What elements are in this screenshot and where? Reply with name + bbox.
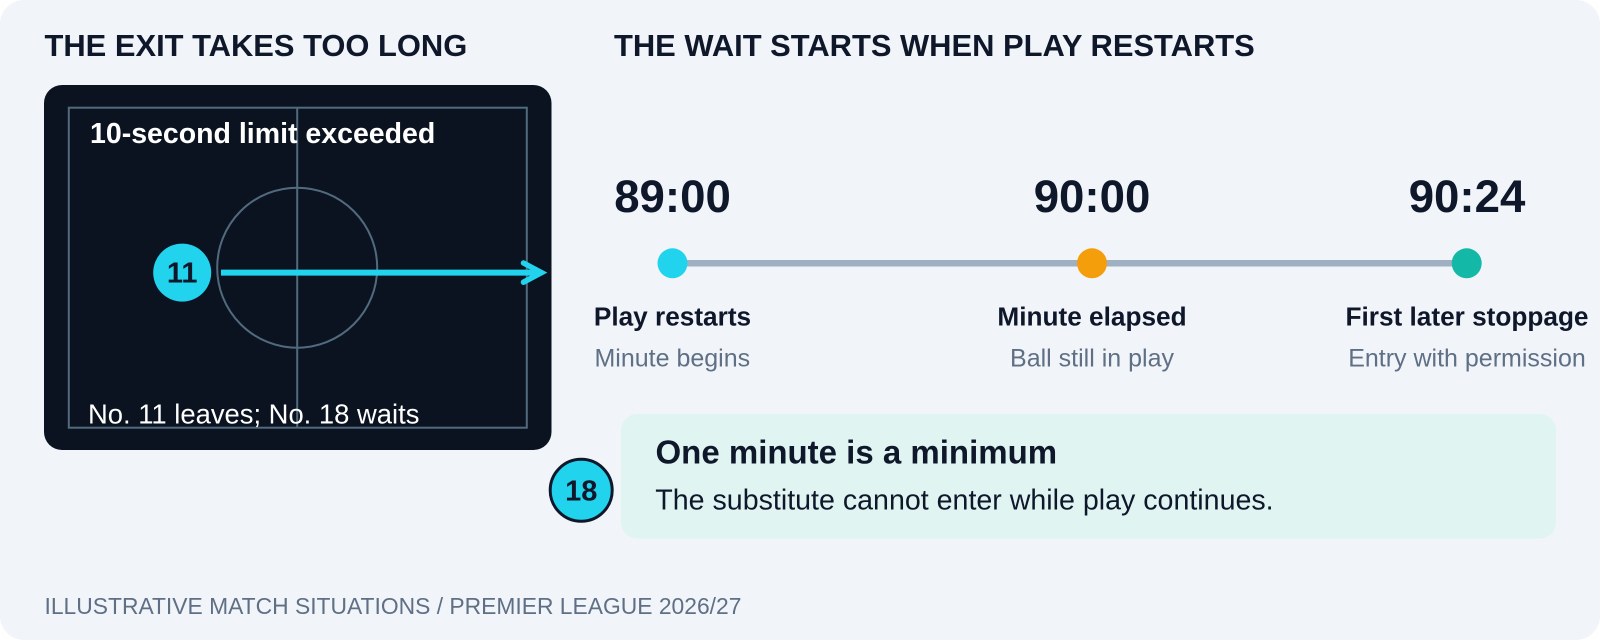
label: minute elapsed <box>997 301 1187 372</box>
callout: The substitute cannot enter while play continues. <box>655 484 1274 516</box>
label: minute elapsed: Ball still in play <box>1010 344 1174 372</box>
heading: exit: THE EXIT TAKES TOO LONG <box>44 28 467 63</box>
time: 89:00: 89:00 <box>614 171 731 222</box>
pitch caption: No. 11 leaves; No. 18 waits <box>88 398 419 429</box>
label: first later stoppage <box>1345 301 1589 372</box>
label: play restarts <box>594 301 751 372</box>
heading: wait: THE WAIT STARTS WHEN PLAY RESTARTS <box>614 28 1255 63</box>
label: first later stoppage: First later stoppage <box>1345 301 1589 331</box>
player 11 marker: 11 <box>167 258 198 290</box>
player 18 marker <box>550 459 612 521</box>
label: play restarts: Minute begins <box>594 344 750 372</box>
label: first later stoppage: Entry with permission <box>1348 344 1586 372</box>
callout <box>621 414 1556 538</box>
timeline <box>594 171 1589 372</box>
label: minute elapsed: Minute elapsed <box>997 301 1187 331</box>
dot: play restarts <box>658 248 688 278</box>
arrow: player exit <box>221 263 542 282</box>
footer: ILLUSTRATIVE MATCH SITUATIONS / PREMIER LEAGUE 2026/27 <box>44 593 741 619</box>
callout: One minute is a minimum <box>656 434 1057 471</box>
label: play restarts: Play restarts <box>594 301 751 331</box>
panel: pitch <box>44 85 552 450</box>
player 18 marker: 18 <box>565 476 597 508</box>
dot: minute elapsed <box>1077 248 1107 278</box>
player 11 marker <box>153 244 211 302</box>
time: 90:24: 90:24 <box>1409 171 1526 222</box>
time: 90:00: 90:00 <box>1034 171 1150 222</box>
dot: first later stoppage <box>1452 248 1482 278</box>
pitch title: 10-second limit exceeded <box>90 118 435 150</box>
